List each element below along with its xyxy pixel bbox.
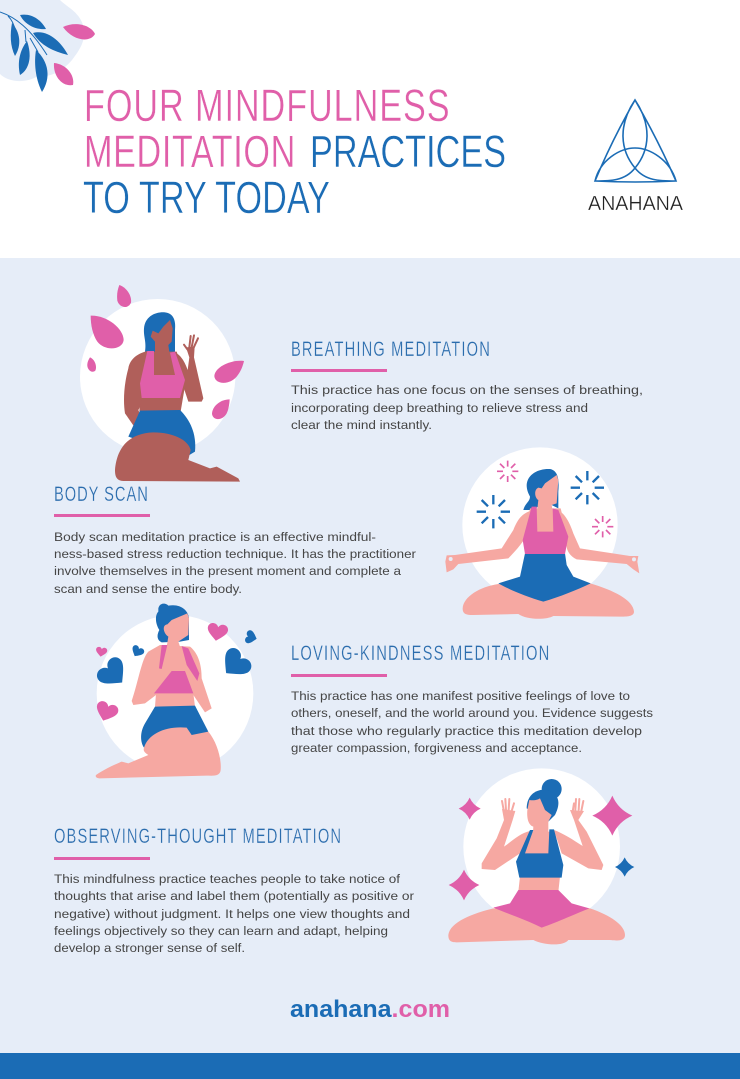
text: observing-thought description: thoughts that arise and label them (potentially as positive or xyxy=(54,889,414,903)
text: loving-kindness description: that those who regularly practice this meditation develop xyxy=(291,724,642,738)
text: observing-thought description: This mindfulness practice teaches people to take notice of xyxy=(54,872,401,886)
decoration: leaf branch xyxy=(0,0,95,92)
accent rule xyxy=(54,857,150,860)
text: loving-kindness description: others, oneself, and the world around you. Evidence suggests xyxy=(291,706,653,720)
text: observing-thought description: feelings objectively so they can learn and adapt, helping xyxy=(54,924,388,938)
text: loving-kindness description: greater compassion, forgiveness and acceptance. xyxy=(291,741,582,755)
footer bar xyxy=(0,1053,740,1079)
title: PRACTICES xyxy=(310,128,506,177)
heading: body scan: BODY SCAN xyxy=(54,482,148,506)
text: breathing meditation description: clear the mind instantly. xyxy=(291,418,432,432)
text: observing-thought description: develop a stronger sense of self. xyxy=(54,941,245,955)
text: body scan description xyxy=(54,530,416,596)
illustration: breathing meditation figure xyxy=(80,285,244,482)
title: MEDITATION xyxy=(84,128,295,177)
text: body scan description: ness-based stress reduction technique. It has the practitioner xyxy=(54,547,416,561)
text: observing-thought description: negative) without judgment. It helps one view thoughts and xyxy=(54,907,410,921)
logo: Anahana xyxy=(588,100,684,215)
text: breathing meditation description xyxy=(291,383,643,432)
title xyxy=(83,82,506,223)
heading: breathing meditation: BREATHING MEDITATION xyxy=(291,337,490,361)
text: breathing meditation description: incorporating deep breathing to relieve stress and xyxy=(291,401,588,415)
heading: observing-thought meditation: OBSERVING-THOUGHT MEDITATION xyxy=(54,824,341,848)
accent rule xyxy=(291,369,387,372)
text: body scan description: Body scan meditation practice is an effective mindful- xyxy=(54,530,376,544)
text: body scan description: involve themselves in the present moment and complete a xyxy=(54,564,401,578)
title: TO TRY TODAY xyxy=(83,174,330,223)
accent rule xyxy=(54,514,150,517)
heading: loving-kindness meditation: LOVING-KINDNESS MEDITATION xyxy=(291,641,549,665)
illustration: observing-thought figure xyxy=(448,768,634,944)
text: breathing meditation description: This practice has one focus on the senses of breathing, xyxy=(291,383,643,397)
text: loving-kindness description xyxy=(291,689,653,755)
illustration: body scan figure xyxy=(445,447,639,619)
logo: Anahana: ANAHANA xyxy=(588,193,684,215)
text: body scan description: scan and sense the entire body. xyxy=(54,582,242,596)
accent rule xyxy=(291,674,387,677)
illustration: loving-kindness figure xyxy=(93,604,258,778)
text: observing-thought description xyxy=(54,872,414,955)
title: FOUR MINDFULNESS xyxy=(84,82,450,131)
panel: light blue content background xyxy=(0,258,740,1053)
text: loving-kindness description: This practice has one manifest positive feelings of love to xyxy=(291,689,630,703)
footer website link text: anahana.com xyxy=(290,996,450,1023)
